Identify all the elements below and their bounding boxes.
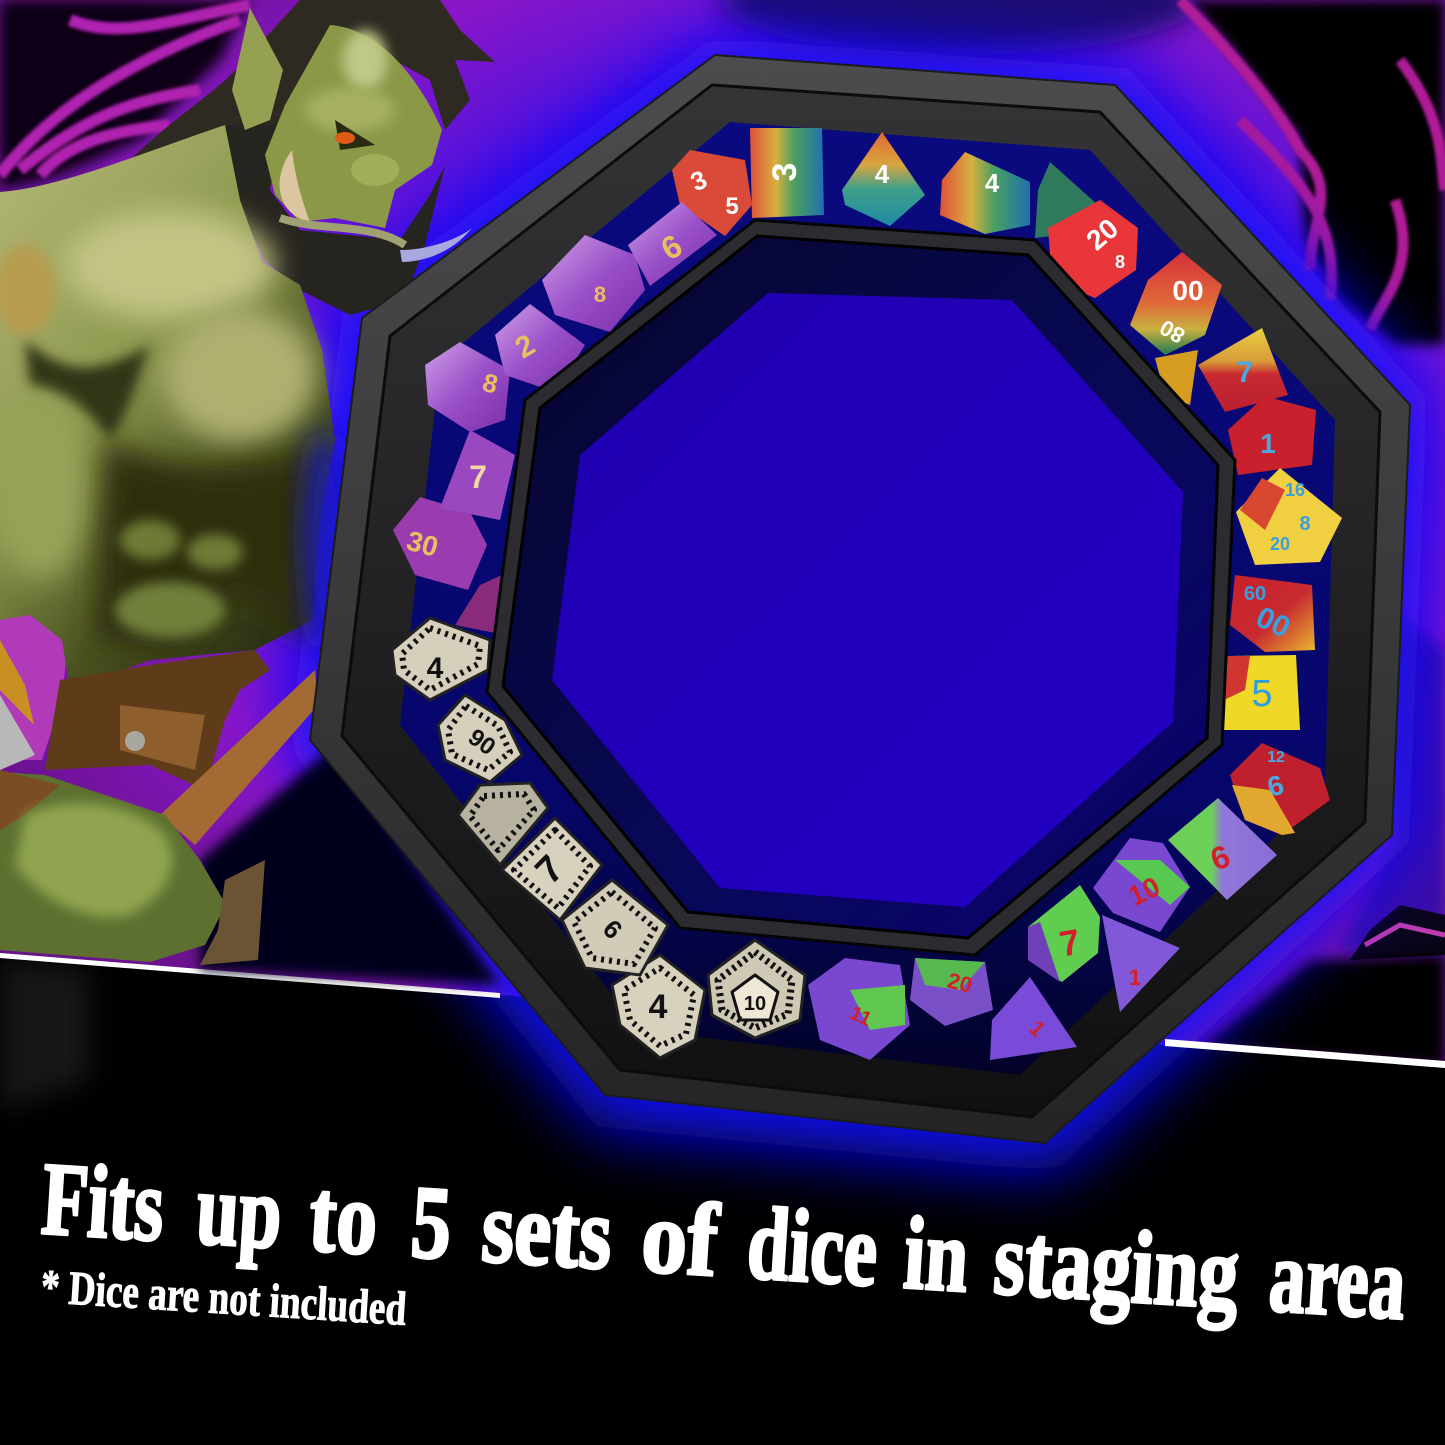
dice set: red and yellow: 00 — [1251, 601, 1295, 645]
dice set: purple marble — [393, 202, 717, 635]
dice set: white with black ink: 10 — [744, 993, 766, 1015]
orc belt — [45, 650, 270, 790]
dark ground shadow below orc — [200, 745, 500, 985]
dice set: rainbow: 8 — [1115, 252, 1125, 272]
background: purple sky with dark corners — [0, 0, 1445, 1070]
dice set: purple marble: 8 — [594, 282, 606, 307]
dice set: red and yellow: 12 — [1267, 749, 1285, 766]
orc warrior illustration — [0, 0, 500, 985]
dice set: rainbow — [672, 128, 1316, 475]
orc cape — [0, 640, 34, 725]
title: of — [638, 1179, 723, 1299]
dice set: red and yellow: 16 — [1285, 480, 1305, 500]
dice set: white with black ink — [392, 618, 805, 1058]
dice set: purple and green: 20 — [945, 968, 975, 998]
dice set: white with black ink: 4 — [649, 988, 668, 1026]
inner wall — [503, 236, 1218, 938]
dice set: purple marble: 30 — [403, 525, 442, 563]
orc nose — [351, 154, 399, 186]
title: to — [306, 1158, 381, 1277]
dice set: rainbow: 1 — [1260, 428, 1276, 459]
blue glow behind tray — [296, 45, 1420, 1165]
dice set: red and yellow: 60 — [1244, 583, 1266, 605]
dice set: purple marble: 7 — [469, 459, 487, 495]
inner rim — [487, 220, 1235, 955]
dice set: purple and green: 6 — [1206, 838, 1235, 878]
background gap under arm — [0, 610, 68, 760]
dice set: purple marble: 8 — [479, 367, 501, 400]
staging tray outer rim — [310, 55, 1410, 1143]
orc hand and wrap — [0, 772, 226, 962]
tray inner wall — [342, 85, 1380, 1117]
dice set: purple and green: 10 — [1123, 871, 1165, 912]
dice set: rainbow: 5 — [725, 193, 739, 220]
dice set: white with black ink: 90 — [463, 724, 500, 761]
dice set: purple and green: 7 — [1056, 921, 1083, 965]
dice set: rainbow: 00 — [1172, 275, 1204, 306]
title: staging — [991, 1201, 1242, 1331]
dice set: white with black ink: 4 — [427, 652, 444, 685]
dice set: purple and green: 1 — [1129, 965, 1141, 990]
footnote: * Dice are not included — [39, 1260, 408, 1336]
dice set: red and yellow: 20 — [1270, 534, 1290, 554]
title: sets — [479, 1169, 616, 1292]
dice set: white with black ink: 6 — [597, 914, 628, 945]
title: in — [901, 1195, 972, 1314]
dice set: purple and green: 11 — [846, 1002, 875, 1031]
orc head — [265, 25, 442, 228]
dice set: red and yellow: 8 — [1299, 513, 1311, 535]
dice set: rainbow: 20 — [1080, 212, 1124, 256]
orc tusks — [280, 150, 472, 262]
dice set: rainbow: 7 — [1237, 356, 1253, 389]
dice set: red and yellow — [1221, 468, 1342, 835]
dice set: purple marble: 2 — [510, 328, 541, 365]
inner floor — [552, 293, 1183, 907]
dice set: purple and green: 1 — [1024, 1016, 1050, 1042]
orc hair — [130, 0, 495, 170]
dice set: purple and green — [808, 798, 1277, 1060]
orc beard — [222, 125, 445, 315]
white divider lines — [0, 953, 1445, 1068]
dice tray inner tower — [487, 220, 1235, 955]
title — [39, 1141, 1409, 1342]
dice set: rainbow: 4 — [875, 159, 890, 189]
title: Fits — [39, 1141, 168, 1264]
lower right black wedge — [1200, 955, 1445, 1066]
axe handle — [160, 670, 318, 845]
orc torso — [0, 125, 335, 690]
lower black band — [0, 958, 1445, 1445]
dice set: rainbow: 4 — [985, 168, 1000, 198]
orc ear — [232, 8, 283, 130]
dice set: purple marble: 6 — [655, 227, 688, 267]
dice set: white with black ink: 7 — [528, 848, 572, 892]
dice set: red and yellow: 5 — [1251, 673, 1273, 715]
title: up — [193, 1151, 285, 1271]
title: 5 — [408, 1164, 455, 1282]
fur loincloth — [200, 860, 265, 965]
orc muscle shading — [0, 210, 347, 650]
dice set: rainbow: 3 — [766, 163, 804, 181]
dice set: rainbow: 80 — [1155, 315, 1189, 349]
tray floor ring — [400, 122, 1335, 1075]
orc eye — [335, 132, 355, 144]
lower left grey fade — [0, 960, 90, 1110]
dice set: rainbow: 3 — [686, 164, 711, 197]
title: dice — [744, 1186, 881, 1309]
dice set: red and yellow: 6 — [1264, 769, 1287, 803]
